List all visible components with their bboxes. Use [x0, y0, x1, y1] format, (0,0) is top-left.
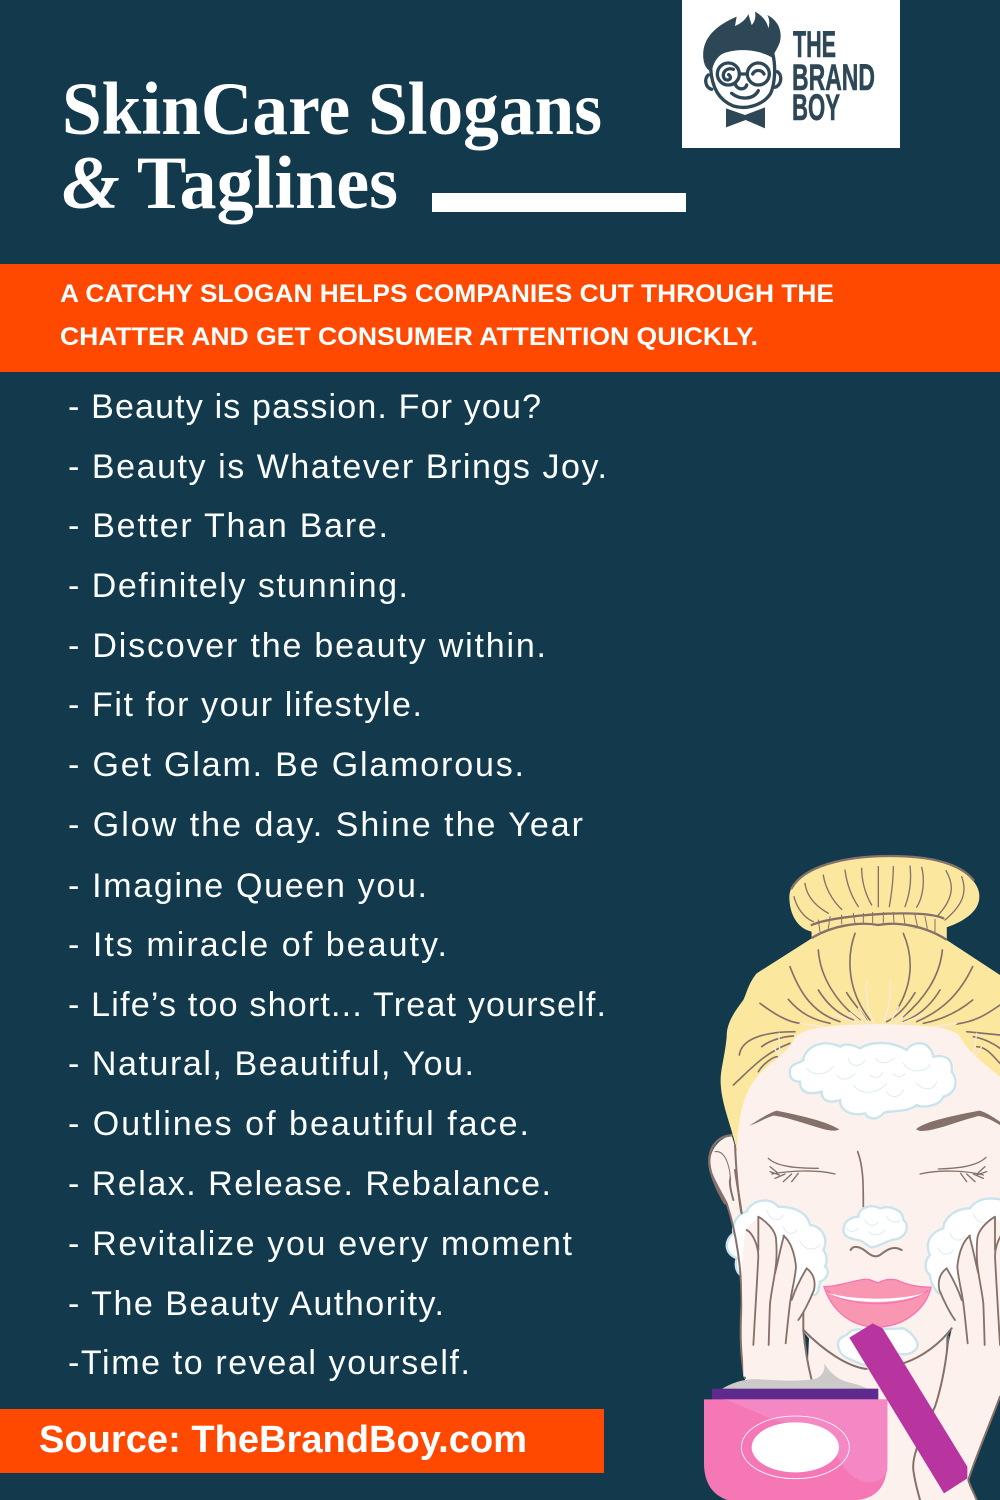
slogan list: - Relax. Release. Rebalance. — [68, 1165, 551, 1203]
illustration: woman washing face with skincare jar — [704, 856, 1000, 1500]
slogan list: - Imagine Queen you. — [68, 867, 427, 905]
slogan list: - Revitalize you every moment — [68, 1225, 573, 1263]
lower face and hands — [704, 1170, 1000, 1500]
source bar: Source: TheBrandBoy.com — [39, 1419, 527, 1461]
foam: nose — [843, 1206, 907, 1247]
hairline strands — [773, 982, 982, 1057]
title — [62, 68, 602, 225]
slogan list: - The Beauty Authority. — [68, 1285, 444, 1323]
slogan list: - Beauty is Whatever Brings Joy. — [68, 448, 607, 486]
face and body skin — [710, 1024, 1000, 1500]
slogan list: - Its miracle of beauty. — [68, 926, 447, 964]
nostrils — [851, 1247, 902, 1256]
banner: intro statement: CHATTER AND GET CONSUMER ATTENTION QUICKLY. — [60, 323, 758, 351]
banner: intro statement: A CATCHY SLOGAN HELPS COMPANIES CUT THROUGH THE — [60, 280, 834, 308]
slogan list: - Better Than Bare. — [68, 507, 388, 545]
slogan list — [68, 388, 607, 1382]
lips — [824, 1279, 931, 1327]
foam: left cheek — [727, 1200, 828, 1295]
slogan list: - Get Glam. Be Glamorous. — [68, 746, 524, 784]
logo: The Brand Boy — [682, 0, 900, 148]
slogan list: - Natural, Beautiful, You. — [68, 1045, 474, 1083]
slogan list: - Definitely stunning. — [68, 567, 408, 605]
logo wordmark — [792, 24, 875, 128]
logo wordmark: BOY — [792, 87, 840, 128]
hair — [721, 912, 1000, 1152]
hair bun — [789, 856, 979, 932]
slogan list: - Glow the day. Shine the Year — [68, 806, 583, 844]
arm outlines — [710, 1170, 1000, 1500]
title: & Taglines — [62, 142, 398, 225]
jaw and neck lines — [803, 1310, 952, 1500]
foam: right cheek — [926, 1198, 1000, 1293]
spatula — [849, 1323, 967, 1493]
slogan list: - Outlines of beautiful face. — [68, 1105, 529, 1143]
ear — [709, 1135, 742, 1215]
closed eyes and nose bridge — [768, 1152, 987, 1207]
logo wordmark: THE — [793, 24, 836, 65]
source bar — [0, 1409, 604, 1473]
slogan list: -Time to reveal yourself. — [68, 1344, 470, 1382]
slogan list: - Beauty is passion. For you? — [68, 388, 541, 426]
gaps between jaw and neck — [803, 1329, 952, 1360]
logo wordmark: BRAND — [792, 57, 875, 98]
left hand — [742, 1217, 815, 1377]
foam: forehead — [790, 1043, 955, 1118]
slogan list: - Discover the beauty within. — [68, 627, 546, 665]
skincare jar — [704, 1363, 887, 1500]
right hand — [938, 1217, 1000, 1377]
title underline bar — [432, 193, 686, 212]
icon: boy with glasses — [703, 12, 781, 128]
eyebrows — [749, 1111, 1000, 1131]
slogan list: - Life’s too short... Treat yourself. — [68, 986, 606, 1024]
slogan list: - Fit for your lifestyle. — [68, 686, 422, 724]
foam: chin — [838, 1328, 918, 1365]
title: SkinCare Slogans — [62, 68, 602, 151]
banner: intro statement — [0, 264, 1000, 372]
